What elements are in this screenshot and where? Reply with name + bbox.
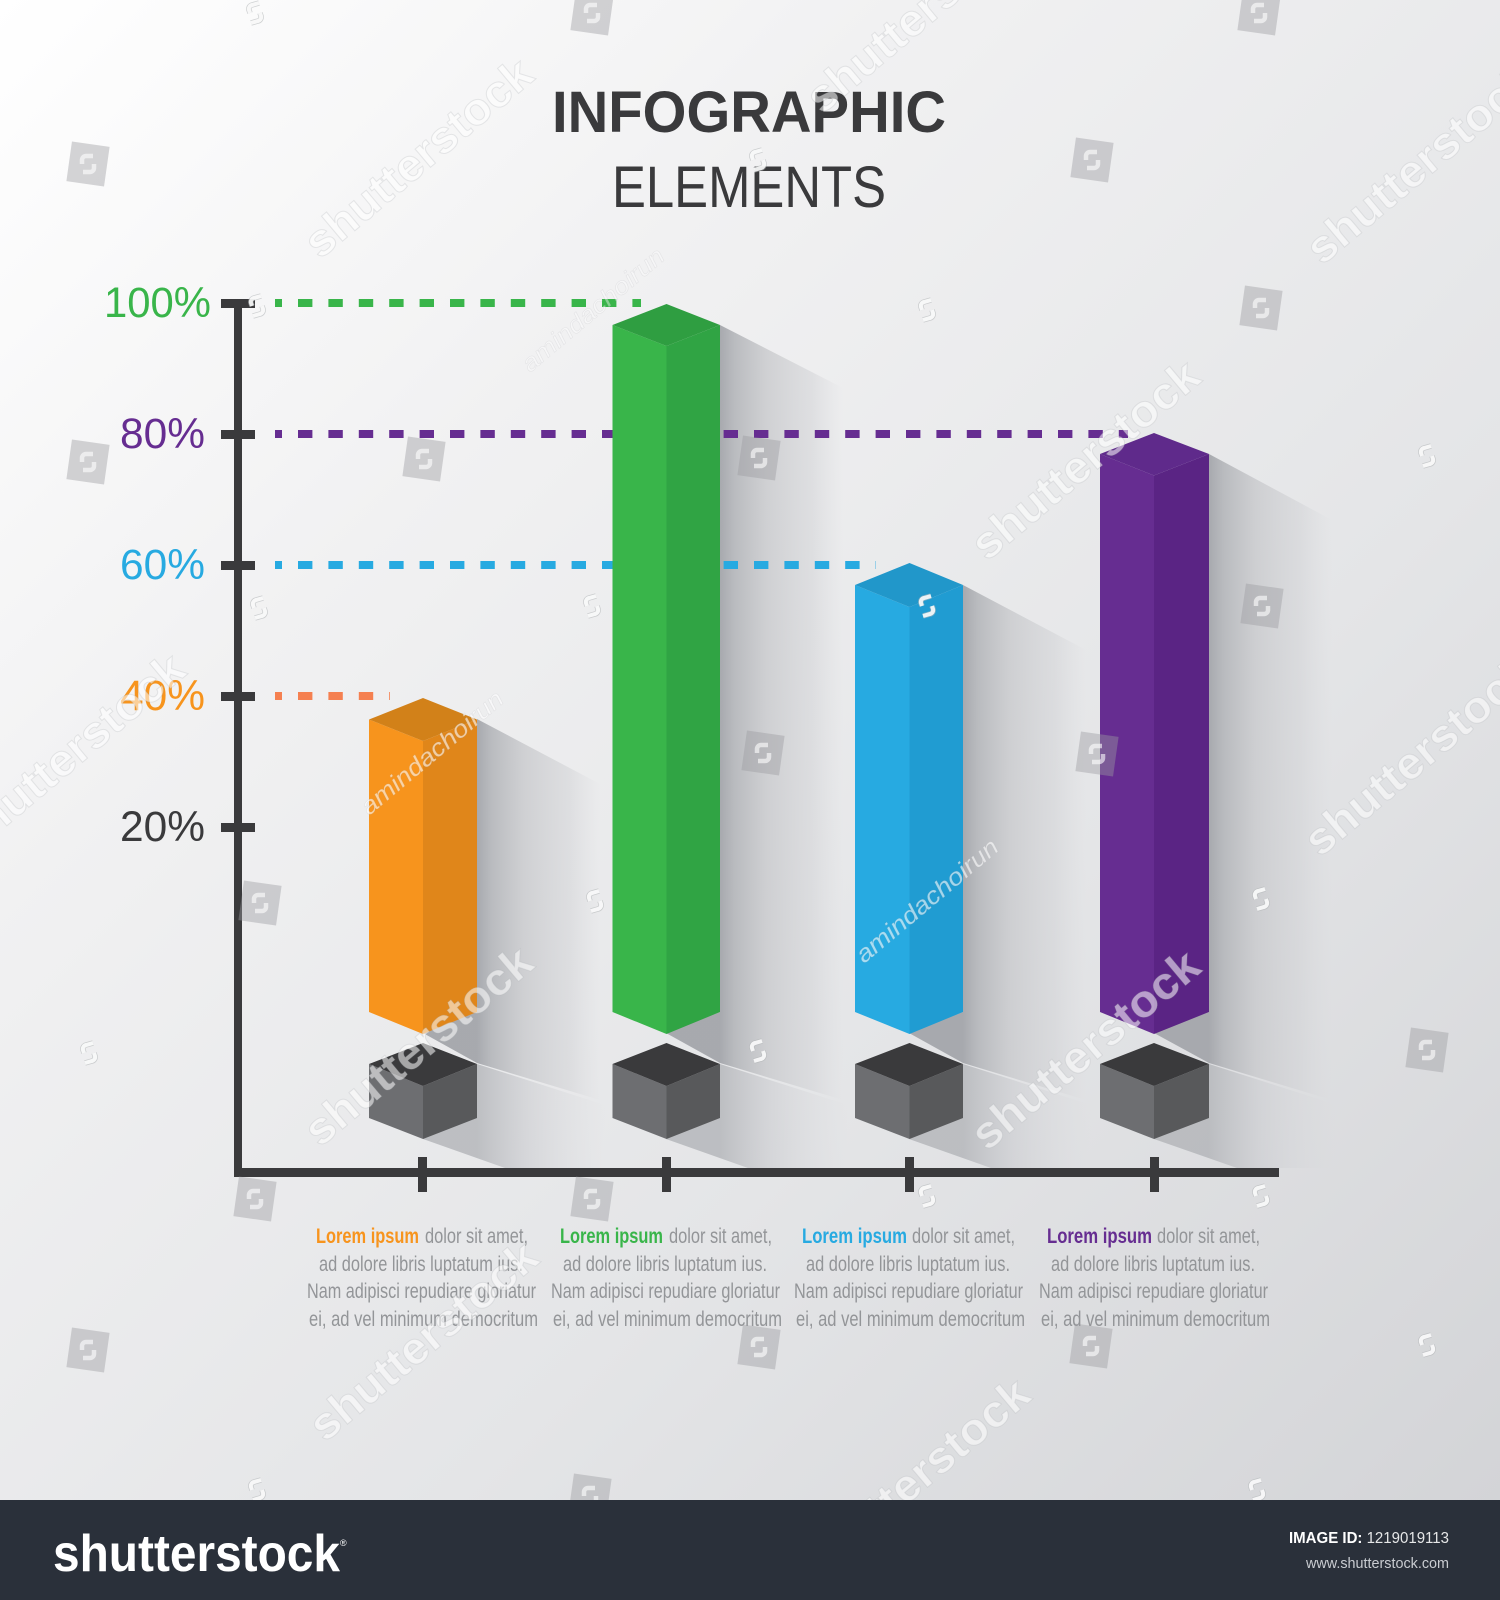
caption: blue: dolor sit amet,	[912, 1225, 1015, 1248]
shadow: purple bar	[1154, 454, 1332, 1100]
watermark text: shutterstock: shutterstock	[961, 349, 1210, 570]
caption: purple: ad dolore libris luptatum ius.	[1051, 1253, 1255, 1276]
caption: orange: Nam adipisci repudiare gloriatur	[307, 1280, 536, 1303]
caption: green: ad dolore libris luptatum ius.	[563, 1253, 767, 1276]
watermark text: shutterstock: shutterstock	[294, 935, 543, 1156]
long shadows	[423, 325, 1337, 1168]
heading: ELEMENTS: ELEMENTS	[612, 155, 886, 220]
shadow: orange block	[423, 1064, 605, 1168]
caption: orange: dolor sit amet,	[425, 1225, 528, 1248]
shadow: green block	[666, 1064, 848, 1168]
guide: 100%	[275, 299, 641, 307]
guide: 80%	[275, 430, 1128, 438]
watermark text: amindachoirun: amindachoirun	[851, 833, 1004, 969]
caption: green: Lorem ipsum	[560, 1225, 663, 1248]
caption: purple: Lorem ipsum	[1047, 1225, 1152, 1248]
caption: purple: dolor sit amet,	[1157, 1225, 1260, 1248]
footer logo: shutterstock	[53, 1525, 340, 1583]
caption: purple: ei, ad vel minimum democritum	[1041, 1308, 1270, 1331]
caption: orange	[307, 1225, 538, 1331]
caption: orange: ei, ad vel minimum democritum	[309, 1308, 538, 1331]
heading: INFOGRAPHIC: INFOGRAPHIC	[552, 80, 946, 145]
caption: blue: Lorem ipsum	[802, 1225, 907, 1248]
label: 40%: 40%	[120, 672, 205, 720]
caption: green: Nam adipisci repudiare gloriatur	[551, 1280, 780, 1303]
footer image id: IMAGE ID: 1219019113	[1289, 1530, 1449, 1547]
caption: green: dolor sit amet,	[669, 1225, 772, 1248]
x axis	[234, 1168, 1279, 1177]
caption: green	[551, 1225, 782, 1331]
caption: blue	[794, 1225, 1025, 1331]
guide: 40%	[275, 692, 390, 700]
caption: blue: ei, ad vel minimum democritum	[796, 1308, 1025, 1331]
label: 20%: 20%	[120, 803, 205, 851]
watermark text: shutterstock: shutterstock	[791, 1367, 1040, 1588]
label: 100%: 100%	[104, 279, 211, 327]
watermark text: shutterstock: shutterstock	[299, 1230, 548, 1451]
block: blue	[855, 1043, 963, 1139]
guide lines	[275, 303, 1128, 696]
watermark text: amindachoirun	[356, 242, 1004, 969]
watermark text: amindachoirun: amindachoirun	[356, 685, 509, 821]
y axis	[234, 303, 242, 1176]
footer url: www.shutterstock.com	[1305, 1555, 1449, 1572]
shadow: green bar	[666, 325, 843, 1100]
bar: blue 60%	[855, 563, 963, 1034]
shadow: purple block	[1154, 1064, 1337, 1168]
axes	[221, 299, 1279, 1192]
caption: purple	[1039, 1225, 1270, 1331]
guide: 60%	[275, 561, 876, 569]
block: green	[612, 1043, 720, 1139]
caption: orange: ad dolore libris luptatum ius.	[319, 1253, 523, 1276]
shadow: orange bar	[423, 719, 600, 1100]
y axis labels	[104, 279, 211, 851]
caption: orange: Lorem ipsum	[316, 1225, 419, 1248]
bar: purple 80%	[1100, 433, 1209, 1034]
watermark text: amindachoirun: amindachoirun	[517, 242, 670, 378]
caption: green: ei, ad vel minimum democritum	[553, 1308, 782, 1331]
caption: purple: Nam adipisci repudiare gloriatur	[1039, 1280, 1268, 1303]
bar: orange 40%	[369, 698, 477, 1034]
x ticks	[418, 1157, 1159, 1192]
block: orange	[369, 1043, 477, 1139]
watermark text: shutterstock: shutterstock	[961, 939, 1210, 1160]
caption: blue: ad dolore libris luptatum ius.	[806, 1253, 1010, 1276]
footer registered mark: ®	[340, 1538, 347, 1548]
watermark text: shutterstock: shutterstock	[294, 47, 543, 268]
y ticks	[221, 299, 255, 832]
block: purple	[1100, 1043, 1209, 1139]
label: 80%: 80%	[120, 410, 205, 458]
caption: blue: Nam adipisci repudiare gloriatur	[794, 1280, 1023, 1303]
label: 60%: 60%	[120, 541, 205, 589]
shadow: blue bar	[909, 585, 1086, 1100]
shadow: blue block	[909, 1064, 1091, 1168]
bar: green 100%	[612, 304, 720, 1034]
title	[552, 80, 946, 220]
footer bar	[0, 1500, 1500, 1600]
